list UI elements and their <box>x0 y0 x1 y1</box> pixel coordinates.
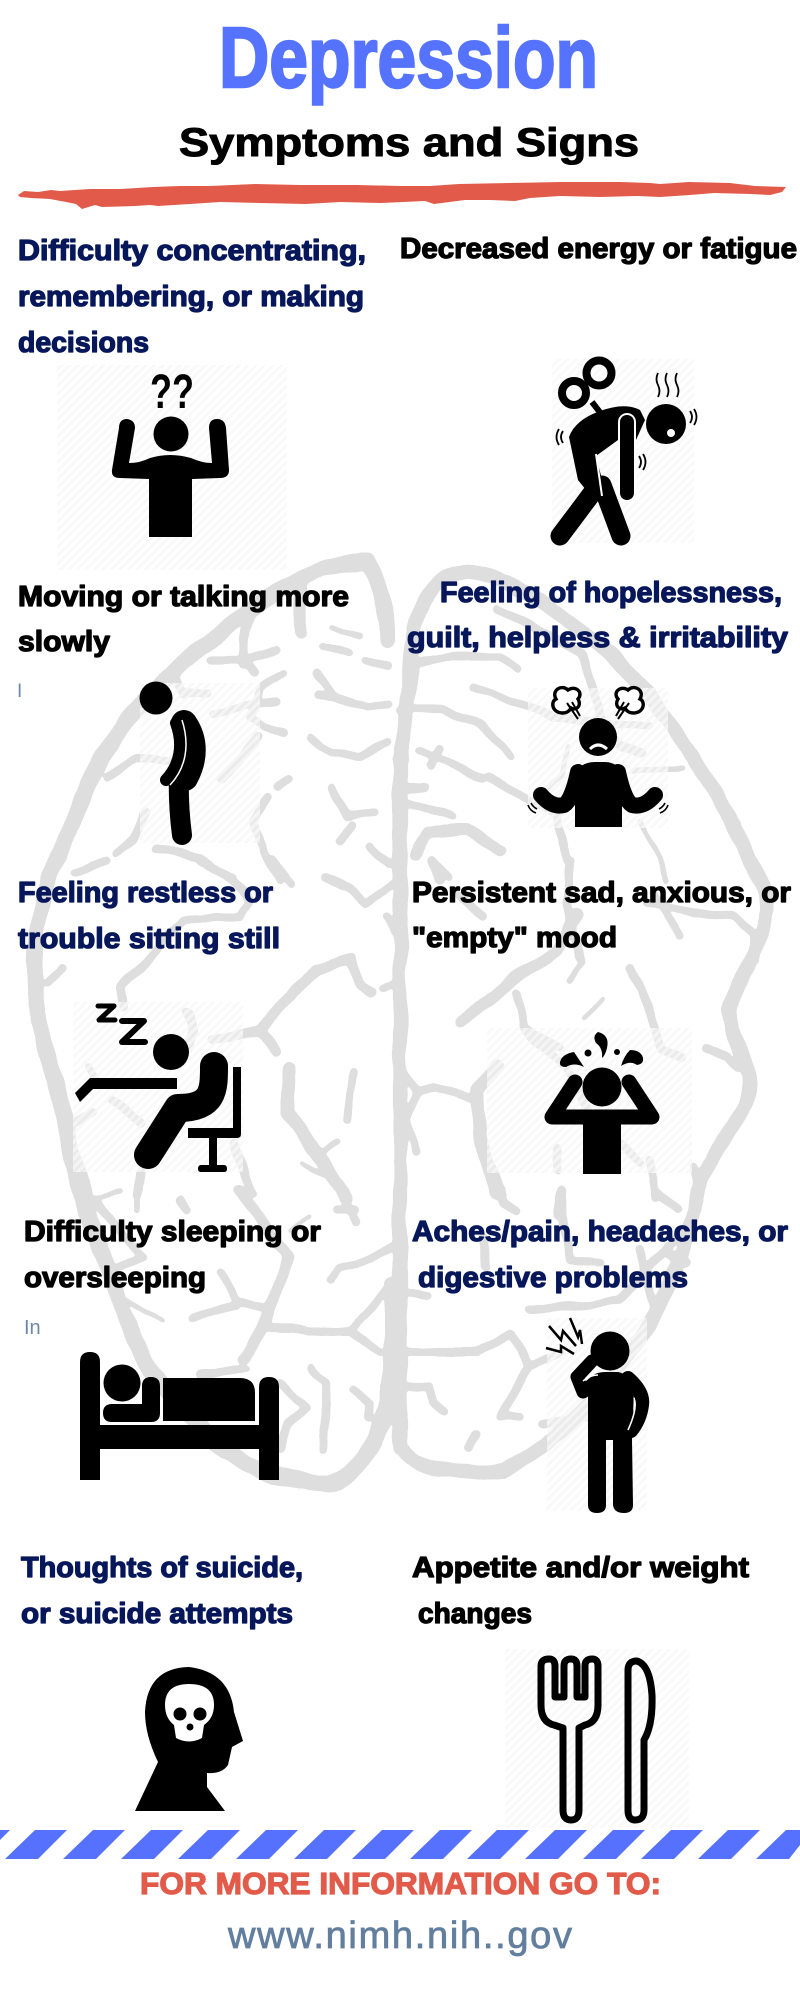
heading: difficulty concentrating <box>18 235 366 359</box>
stray text fragment: In <box>24 1317 41 1339</box>
icon: person holding head <box>552 1032 652 1174</box>
heading: appetite and weight: changes <box>418 1598 532 1630</box>
heading: thoughts of suicide <box>21 1552 303 1630</box>
heading: difficulty sleeping <box>24 1216 321 1294</box>
heading: appetite and weight: Appetite and/or weight <box>412 1552 749 1584</box>
panel: decreased energy <box>400 233 797 536</box>
panel: difficulty sleeping <box>24 1216 321 1480</box>
icon: person with neck pain <box>546 1318 642 1513</box>
heading: difficulty sleeping: Difficulty sleeping or <box>24 1216 321 1248</box>
heading: difficulty concentrating: remembering, or making <box>18 281 364 313</box>
red brush stroke divider <box>18 182 786 209</box>
panel: moving or talking slowly <box>17 581 349 835</box>
heading: persistent sad mood <box>412 877 791 954</box>
heading: difficulty concentrating: Difficulty concentrating, <box>18 235 366 267</box>
icon: person asleep at desk <box>75 1006 241 1172</box>
heading: moving or talking slowly <box>18 581 349 658</box>
subtitle: Symptoms and Signs <box>179 121 639 165</box>
heading: hopelessness: Feeling of hopelessness, <box>440 577 782 609</box>
panel: difficulty concentrating <box>18 235 366 537</box>
heading: thoughts of suicide: or suicide attempts <box>21 1598 293 1630</box>
heading: persistent sad mood: "empty" mood <box>412 922 617 954</box>
icon: confused person with question marks: ?? <box>150 366 194 419</box>
heading: moving or talking slowly: slowly <box>18 626 110 658</box>
footer url: www.nimh.nih..gov <box>227 1915 572 1957</box>
heading: feeling restless: Feeling restless or <box>18 877 273 909</box>
blue striped divider <box>0 1830 800 1859</box>
panel: aches and pain <box>412 1216 788 1513</box>
brain background illustration <box>34 562 768 1484</box>
heading: appetite and weight <box>412 1552 749 1630</box>
stray cursor text: I <box>17 681 22 702</box>
heading: decreased energy: Decreased energy or fatigue <box>400 233 797 265</box>
icon: head silhouette with skull <box>135 1667 243 1811</box>
heading: aches and pain <box>412 1216 788 1294</box>
heading: thoughts of suicide: Thoughts of suicide, <box>21 1552 303 1584</box>
heading: moving or talking slowly: Moving or talking more <box>18 581 349 613</box>
heading: aches and pain: digestive problems <box>418 1262 688 1294</box>
heading: feeling restless: trouble sitting still <box>18 923 280 955</box>
icon: frustrated person with steam <box>528 688 668 827</box>
panel: appetite and weight <box>412 1552 749 1820</box>
heading: hopelessness <box>407 577 788 654</box>
footer call to action: FOR MORE INFORMATION GO TO: <box>140 1866 661 1901</box>
heading: hopelessness: guilt, helpless & irritability <box>407 622 788 654</box>
heading: difficulty concentrating: decisions <box>18 327 149 359</box>
heading: persistent sad mood: Persistent sad, anxious, or <box>412 877 791 909</box>
icon: slumped standing person <box>140 682 193 835</box>
heading: difficulty sleeping: oversleeping <box>24 1262 206 1294</box>
icon: fork and knife <box>541 1659 652 1820</box>
panel: thoughts of suicide <box>21 1552 303 1811</box>
icon: confused person with question marks <box>112 366 229 537</box>
icon: person in bed <box>80 1352 279 1480</box>
title: Depression <box>219 11 598 106</box>
hatch backdrops behind icons <box>57 359 694 1828</box>
heading: feeling restless <box>18 877 280 955</box>
panel: persistent sad mood <box>412 877 791 1174</box>
icon: tired wind-up person <box>556 360 696 536</box>
panel: feeling restless <box>18 877 280 1172</box>
panel: hopelessness <box>407 577 788 827</box>
heading: aches and pain: Aches/pain, headaches, or <box>412 1216 788 1248</box>
